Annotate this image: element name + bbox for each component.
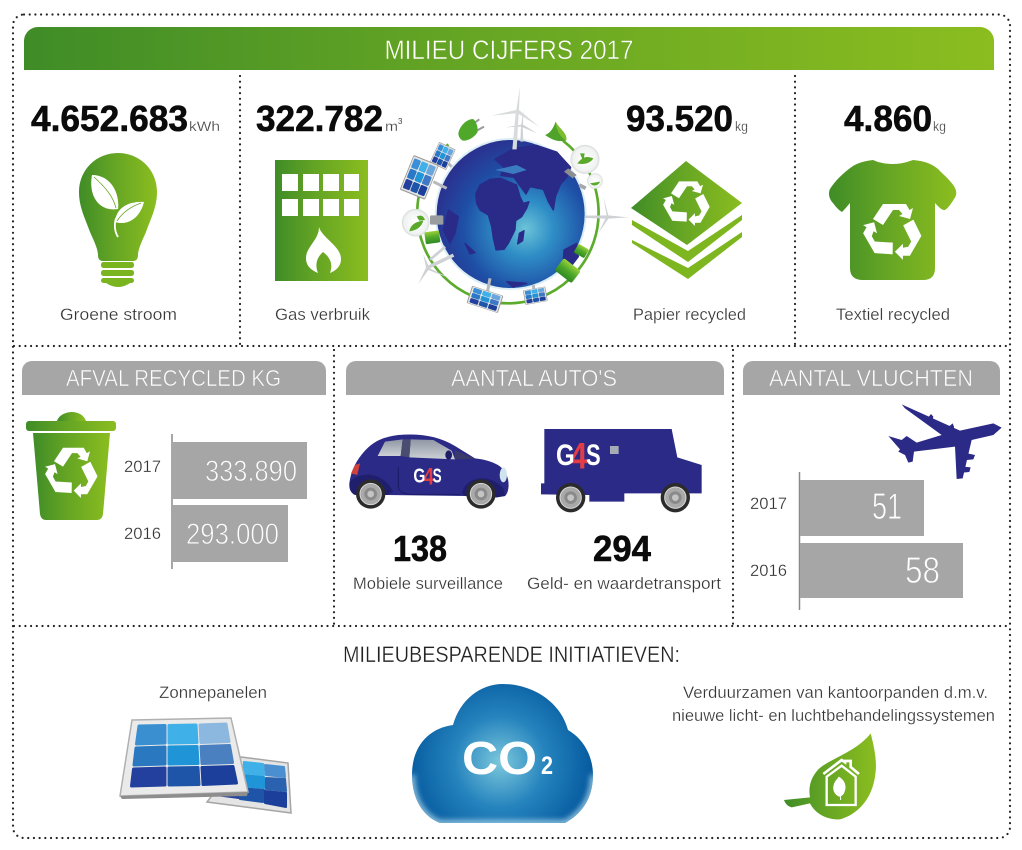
logo: G (556, 439, 575, 472)
number: geld- en waardetransport: 294 (593, 528, 651, 569)
heading bar (743, 361, 1000, 395)
icon: CO2 cloud (412, 684, 593, 823)
bar chart: 333.890 (205, 455, 297, 488)
number: geld- en waardetransport (527, 528, 721, 593)
batteries (424, 230, 589, 283)
icon: recycle bin (26, 412, 116, 520)
bar chart: 2016 (750, 561, 787, 580)
number: kWh: 4.652.683 (31, 98, 188, 139)
logo: 4 (423, 463, 435, 490)
bar chart (750, 472, 963, 610)
label: Papier recycled (633, 305, 746, 324)
title: MILIEU CIJFERS 2017 (384, 35, 634, 65)
plug (458, 119, 484, 141)
number: mobiele surveillance: 138 (393, 528, 447, 569)
number: kg: kg (933, 118, 946, 134)
panel: afval recycled (22, 361, 326, 569)
logo (556, 434, 601, 476)
icon: airplane (888, 404, 1002, 479)
icon: armoured van (541, 429, 702, 512)
solar rods (433, 160, 534, 293)
logo: 4 (570, 434, 588, 476)
panel: aantal vluchten (743, 361, 1002, 610)
icon: CO2 cloud: 2 (541, 752, 553, 780)
heading bar: AANTAL AUTO'S (451, 365, 617, 391)
icon: CO2 cloud: CO (462, 732, 537, 784)
bar chart: 2017 (124, 457, 161, 476)
label: zonnepanelen: Zonnepanelen (159, 683, 267, 702)
panel: aantal auto's (346, 361, 724, 593)
bar chart: 51 (872, 486, 902, 527)
label: Gas verbruik (275, 305, 370, 324)
solar panels (430, 142, 455, 170)
label: Groene stroom (60, 305, 177, 324)
panel: milieubesparende initiatieven (120, 642, 995, 823)
bar chart: 293.000 (186, 518, 279, 551)
icon: solar panels (120, 718, 291, 813)
number: kg: 4.860 (844, 98, 932, 139)
heading bar: AANTAL VLUCHTEN (769, 365, 973, 391)
bar chart (124, 434, 307, 569)
logo (413, 463, 442, 490)
text: verduurzamen: Verduurzamen van kantoorpanden d.m.v. (683, 683, 988, 702)
bar chart: 2017 (750, 494, 787, 513)
panel: papier recycled (626, 98, 748, 324)
icon: paper stack (631, 161, 742, 279)
heading bar (22, 361, 326, 395)
number: mobiele surveillance: Mobiele surveillance (353, 574, 503, 593)
icon: globe with renewable energy (400, 87, 628, 313)
panel: gas verbruik (256, 98, 403, 324)
text: verduurzamen: nieuwe licht- en luchtbehandelingssystemen (672, 706, 995, 725)
bar chart: 58 (905, 550, 940, 591)
title bar (24, 27, 994, 70)
bulbs (402, 145, 603, 236)
number: kg: kg (735, 118, 748, 134)
icon: building with flame (275, 160, 368, 281)
text: verduurzamen (672, 683, 995, 725)
label: Textiel recycled (836, 305, 950, 324)
number: kg: 93.520 (626, 98, 733, 139)
icon: car (349, 435, 509, 509)
logo: S (433, 465, 442, 487)
icon: t-shirt (829, 160, 956, 280)
leaves (545, 122, 566, 141)
bar chart: 2016 (124, 524, 161, 543)
heading: MILIEUBESPARENDE INITIATIEVEN: (343, 642, 680, 667)
logo: S (586, 439, 601, 472)
heading bar: AFVAL RECYCLED KG (66, 365, 281, 391)
turbines (418, 87, 628, 284)
icon: green leaf with house (784, 733, 876, 819)
icon: light bulb (79, 153, 157, 287)
number: m3: m (385, 118, 398, 134)
number: geld- en waardetransport: Geld- en waardetransport (527, 574, 721, 593)
logo: G (413, 465, 425, 487)
number: kWh: kWh (189, 118, 220, 134)
number: mobiele surveillance (353, 528, 503, 593)
heading bar (346, 361, 724, 395)
panel: groene stroom (31, 98, 220, 324)
number: m3: 322.782 (256, 98, 383, 139)
number: m3: 3 (398, 117, 403, 126)
panel: textiel recycled (829, 98, 956, 324)
